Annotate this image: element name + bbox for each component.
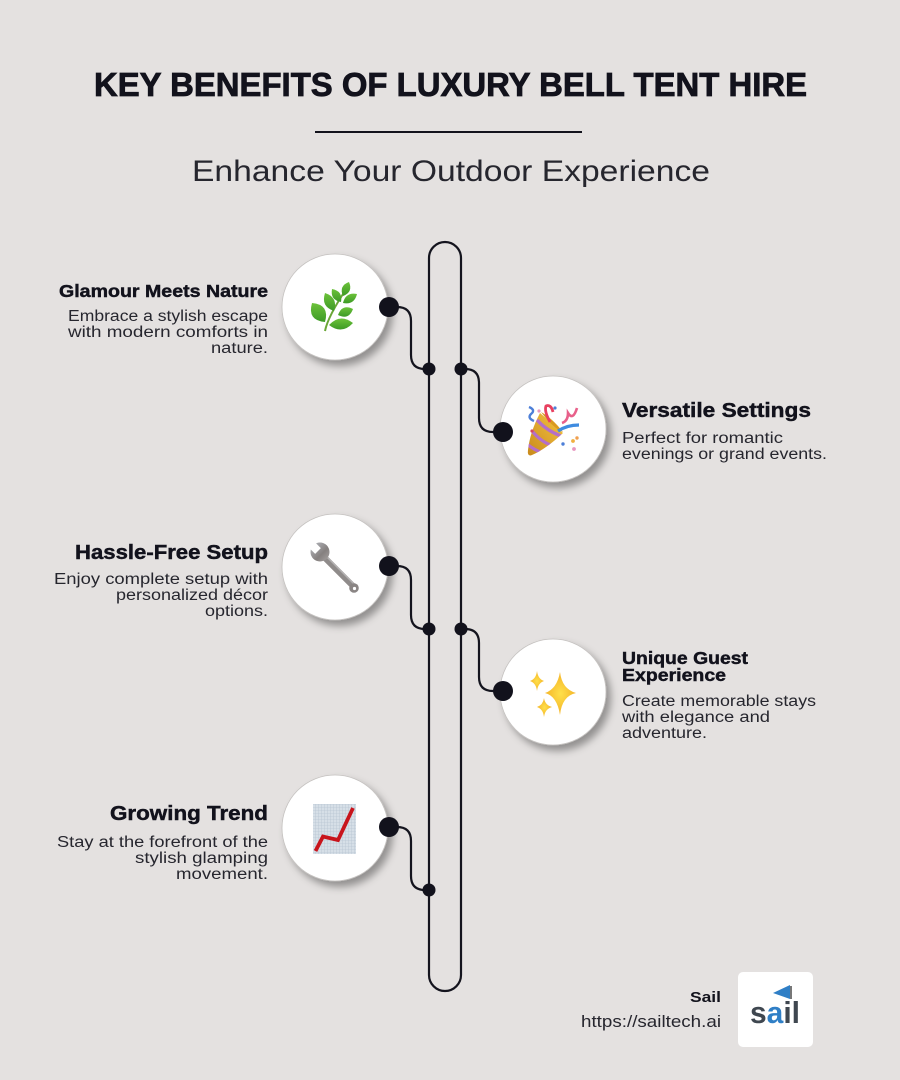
description: [622, 430, 827, 463]
connector: Versatile Settings: [454, 362, 503, 432]
icon: chart increasing: [282, 775, 388, 881]
subtitle: Enhance Your Outdoor Experience: [192, 155, 710, 188]
brand URL: https://sailtech.ai: [581, 1013, 721, 1031]
heading: Hassle-Free Setup: [75, 542, 268, 564]
description: adventure.: [622, 725, 707, 742]
connector: Hassle-Free Setup: [389, 566, 436, 636]
icon: herb: [282, 254, 388, 360]
description: personalized décor: [116, 587, 268, 604]
icon: party popper: [500, 376, 606, 482]
description: Perfect for romantic: [622, 430, 783, 447]
description: Stay at the forefront of the: [57, 834, 268, 851]
description: stylish glamping: [135, 850, 268, 867]
description: [621, 693, 816, 742]
title: KEY BENEFITS OF LUXURY BELL TENT HIRE: [94, 66, 807, 103]
brand name: Sail: [690, 989, 721, 1006]
panel: Versatile Settings: [493, 376, 827, 482]
heading: [622, 648, 748, 685]
heading: Unique Guest: [622, 648, 748, 668]
description: Enjoy complete setup with: [54, 571, 268, 588]
node dot: [493, 422, 513, 442]
heading: Growing Trend: [110, 803, 268, 825]
logo: sail: [750, 995, 800, 1030]
panel: Growing Trend: [57, 775, 399, 883]
heading: Experience: [622, 665, 726, 685]
description: [67, 308, 268, 357]
description: Create memorable stays: [622, 693, 816, 710]
central timeline track: [429, 242, 461, 991]
node dot: [379, 297, 399, 317]
description: movement.: [176, 866, 268, 883]
description: [57, 834, 268, 883]
node dot: [379, 556, 399, 576]
heading: Versatile Settings: [622, 400, 811, 422]
connector: Glamour Meets Nature: [389, 307, 436, 376]
icon: sparkles: [500, 639, 606, 745]
connector: Growing Trend: [389, 827, 436, 896]
icon: wrench: [282, 514, 388, 620]
node dot: [493, 681, 513, 701]
description: Embrace a stylish escape: [68, 308, 268, 325]
description: [54, 571, 268, 620]
logo: [738, 972, 813, 1047]
heading: Glamour Meets Nature: [59, 281, 268, 301]
description: with elegance and: [621, 709, 770, 726]
node dot: [379, 817, 399, 837]
connector: Unique Guest Experience: [454, 622, 503, 691]
panel: Hassle-Free Setup: [54, 514, 399, 620]
description: nature.: [211, 340, 268, 357]
title divider: [315, 131, 582, 133]
panel: Unique Guest Experience: [493, 639, 816, 745]
panel: Glamour Meets Nature: [59, 254, 399, 360]
description: with modern comforts in: [67, 324, 268, 341]
description: options.: [205, 603, 268, 620]
description: evenings or grand events.: [622, 446, 827, 463]
